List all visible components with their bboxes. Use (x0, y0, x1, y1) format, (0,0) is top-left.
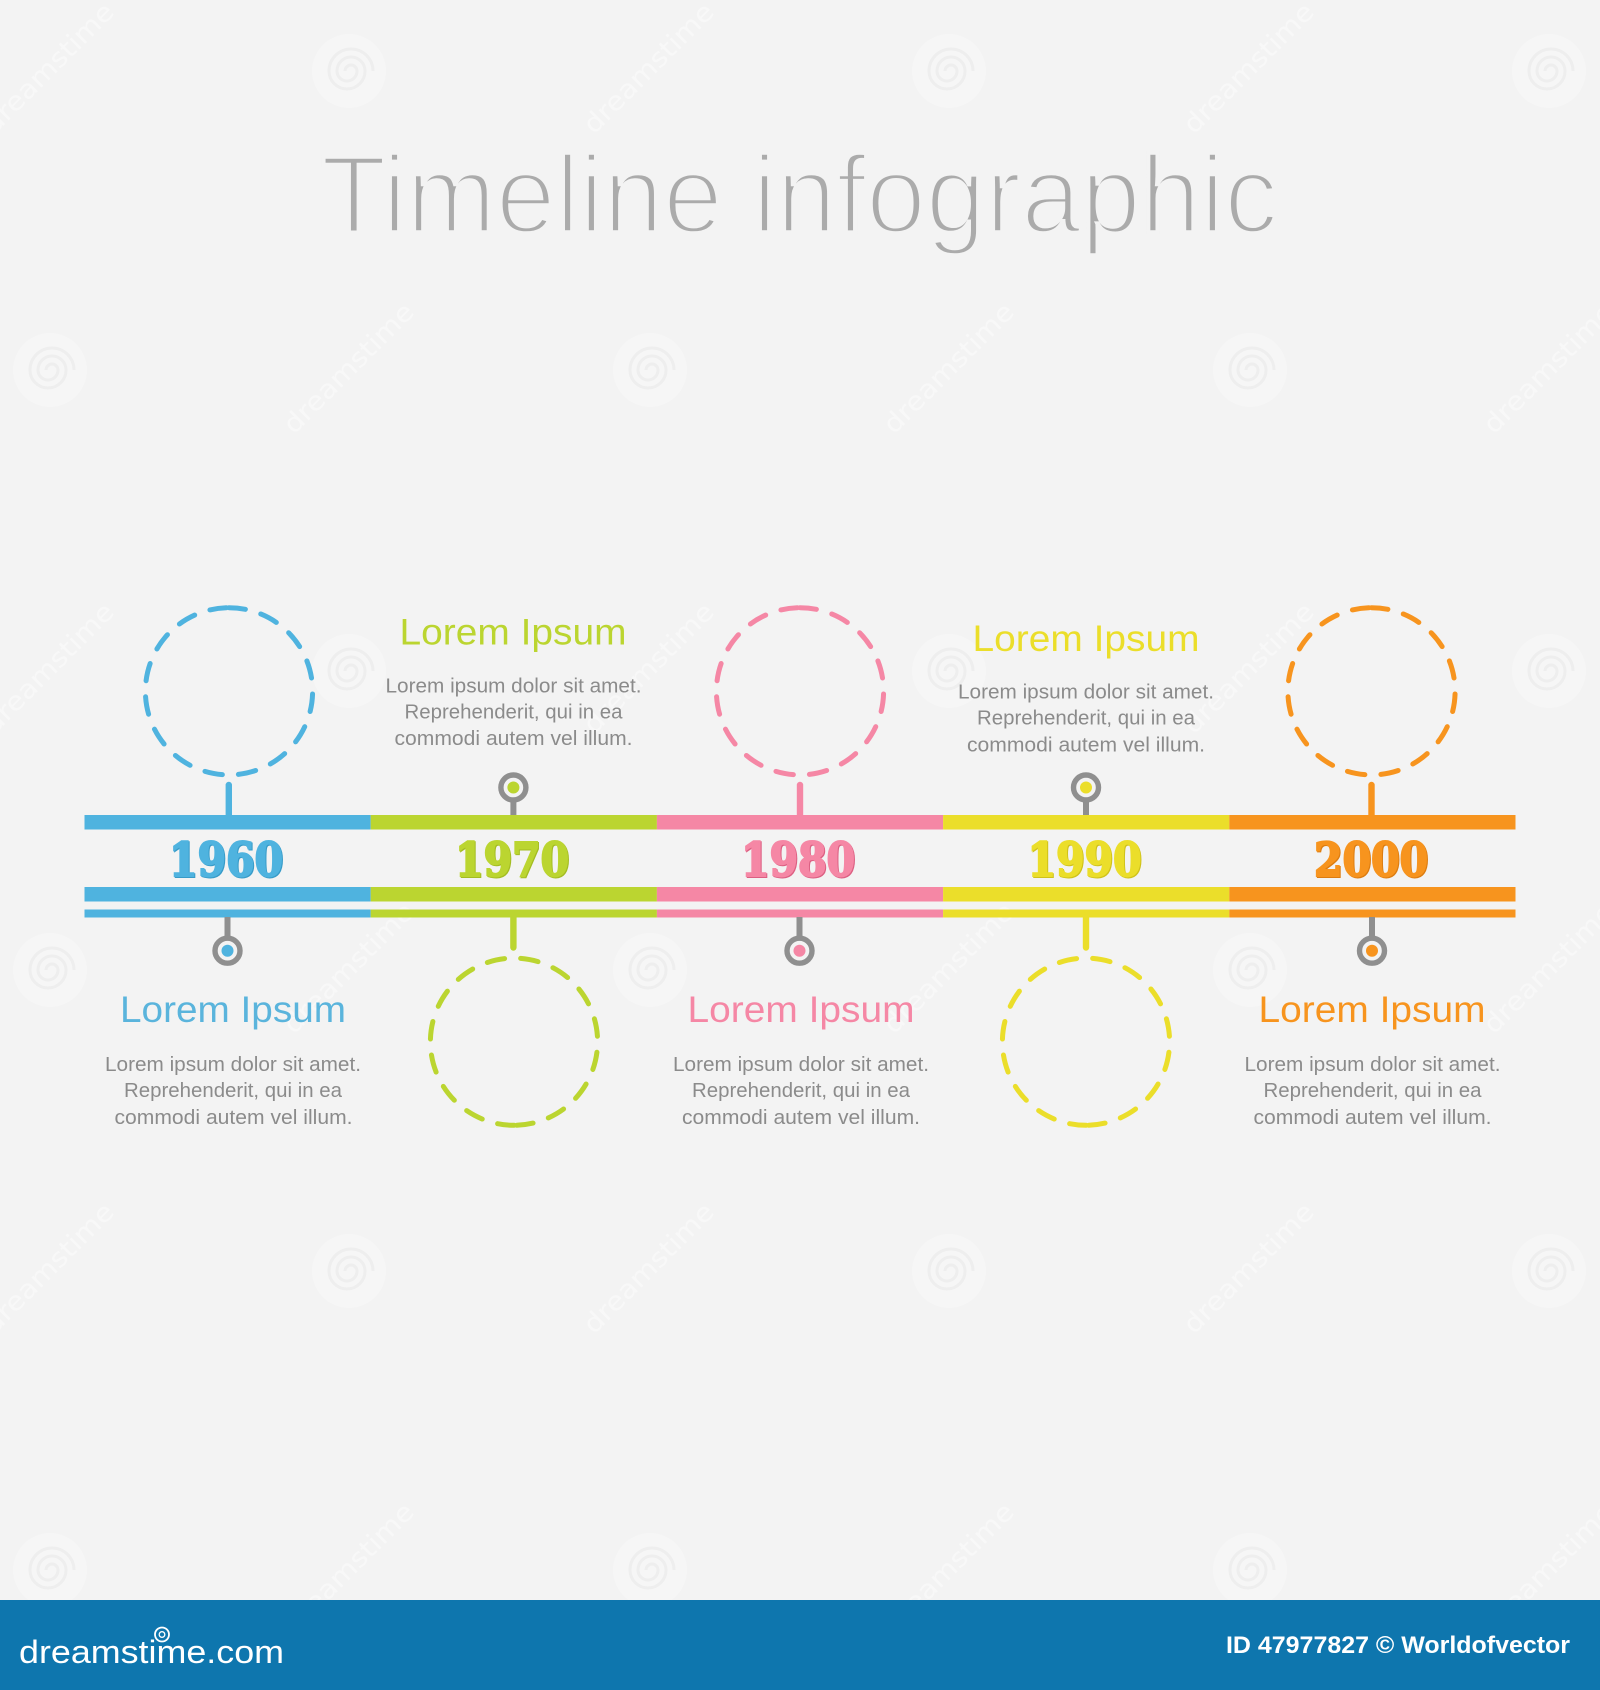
year: 1970: 1970 (455, 833, 569, 888)
description: 1960: commodi autem vel illum. (114, 1107, 352, 1129)
connector: 1960 (226, 785, 232, 815)
footer band (0, 1600, 1600, 1690)
timeline bars: 1970 (371, 815, 657, 918)
pin: 1990 (1074, 775, 1098, 815)
timeline bars: 1990 (943, 815, 1229, 918)
dashed circle: 2000 (1288, 608, 1455, 775)
description: 1970: commodi autem vel illum. (394, 728, 632, 750)
description: 1990 (958, 682, 1214, 756)
footer logo: dreamstime.com (19, 1634, 284, 1670)
timeline bars: 1980 (657, 815, 943, 918)
heading: 1990: Lorem Ipsum (972, 618, 1200, 659)
description: 2000: Reprehenderit, qui in ea (1264, 1080, 1482, 1102)
heading: 1980: Lorem Ipsum (688, 989, 914, 1030)
pin: 1960 (215, 917, 240, 963)
pin: 1980 (787, 917, 812, 963)
year: 1990: 1990 (1028, 833, 1142, 888)
year: 1960: 1960 (169, 833, 283, 888)
title: Timeline infographic (321, 134, 1278, 256)
timeline column: 1960 (84, 608, 371, 1129)
description: 1970: Reprehenderit, qui in ea (404, 702, 623, 724)
description: 1980: Lorem ipsum dolor sit amet. (673, 1054, 929, 1076)
description: 1960 (105, 1054, 361, 1129)
pin: 2000 (1360, 917, 1384, 963)
description: 2000: commodi autem vel illum. (1254, 1107, 1492, 1129)
year: 1980: 1980 (741, 833, 855, 888)
heading: 1970: Lorem Ipsum (400, 612, 626, 652)
description: 1960: Reprehenderit, qui in ea (124, 1080, 343, 1102)
description: 1970: Lorem ipsum dolor sit amet. (386, 676, 642, 698)
description: 1990: Lorem ipsum dolor sit amet. (958, 682, 1214, 704)
description: 1970 (386, 676, 642, 750)
dashed circle: 1970 (430, 958, 598, 1125)
footer credit: ID 47977827 © Worldofvector (1226, 1632, 1570, 1659)
dashed circle: 1990 (1002, 958, 1170, 1125)
description: 1960: Lorem ipsum dolor sit amet. (105, 1054, 361, 1076)
dashed circle: 1960 (145, 608, 313, 775)
pin: 1970 (501, 775, 526, 815)
timeline column: 1980 (657, 608, 943, 1129)
timeline bars: 1960 (84, 815, 371, 918)
connector: 1990 (1083, 917, 1089, 948)
timeline column: 1990 (943, 618, 1229, 1125)
description: 1980: commodi autem vel illum. (682, 1107, 920, 1129)
dashed circle: 1980 (716, 608, 884, 775)
heading: 2000: Lorem Ipsum (1258, 989, 1486, 1030)
timeline column: 2000 (1229, 608, 1516, 1129)
description: 1980: Reprehenderit, qui in ea (692, 1080, 911, 1102)
description: 1990: commodi autem vel illum. (967, 734, 1205, 756)
timeline column: 1970 (371, 612, 657, 1125)
connector: 1980 (797, 785, 803, 815)
description: 2000 (1244, 1054, 1500, 1129)
description: 2000: Lorem ipsum dolor sit amet. (1244, 1054, 1500, 1076)
description: 1980 (673, 1054, 929, 1129)
connector: 2000 (1368, 785, 1375, 815)
year: 2000: 2000 (1314, 833, 1428, 888)
timeline bars: 2000 (1229, 815, 1516, 918)
description: 1990: Reprehenderit, qui in ea (977, 708, 1196, 730)
heading: 1960: Lorem Ipsum (120, 989, 346, 1030)
connector: 1970 (510, 917, 517, 948)
